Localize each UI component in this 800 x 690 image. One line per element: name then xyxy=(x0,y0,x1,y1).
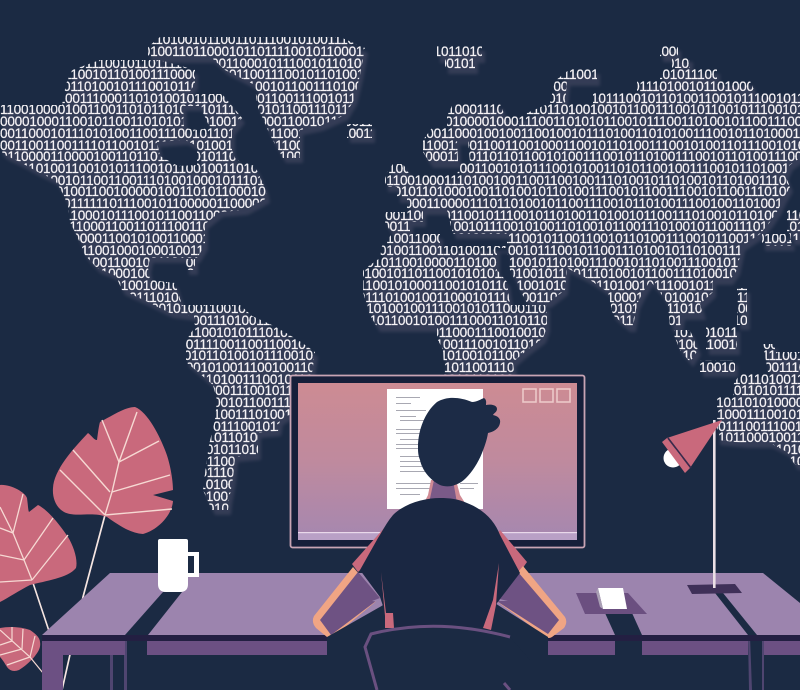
binary world map: 00110011101111110111001011000001100000110011101111101110000001100001110110100101100111001011010011100100110100101 xyxy=(0,196,797,211)
binary world map: 10010110100111000110101001011000111001100111001011010011100010110100111001011010001101110010110100110010111001011 xyxy=(0,91,800,106)
binary world map: 01001110010110000110001101011100101100111010010110100111000101101001110010110100111001100111001011011101101010000 xyxy=(0,395,800,410)
desk top xyxy=(42,573,800,635)
binary world map: 10011100101100111010010110100111001011001110010110100111010010110011100101101001110010110100111001011010011100101 xyxy=(0,465,800,480)
window buttons xyxy=(523,389,570,402)
desk front band xyxy=(42,641,800,690)
plant: large leaf xyxy=(53,407,173,690)
binary world map: 00110011001111011001011100110100111001011001001000110000100110011001100110010001100101101001110010100110111001010 xyxy=(0,138,800,153)
lamp bulb xyxy=(664,448,682,468)
desk thin back legs xyxy=(110,636,764,690)
binary world map: 11100110011100011001101110011001100011000110010011010100110010110010111001010011010010110011101001011001110100101 xyxy=(0,219,800,234)
binary world map: 00110001011101010011001110010110110101110010100110011100101100110001001001100100101110100110101001110010110100011 xyxy=(0,126,800,141)
desk lip xyxy=(42,635,800,641)
binary world map: 10110001101001011001110100100111001010011000011010011101001001100010111010011010010111000110101001011001110010110 xyxy=(0,290,800,305)
binary world map: 10100111001010110001011100001010011100100110110010101100110100101100111010010110100111001011001110100101101001110 xyxy=(0,360,800,375)
desk gap left xyxy=(125,592,182,635)
left forearm xyxy=(313,567,380,638)
binary world map: 00001000110010110011010101100100110100011001011100110101010011010000100011100110101011001011100110100101100111001 xyxy=(0,114,800,129)
chair xyxy=(365,626,530,690)
binary world map: 01100001100001001101101101001011000110010011011101111101100000011001101101100101001110010110100111001011010011100 xyxy=(0,149,800,164)
binary world map: 01001011010011100101100111010010110100111001011010011100101100111010010110011100101101001110010110100101100111010 xyxy=(0,501,800,516)
binary world map: 10010011100011010110010011011000101101111001011000110100111001011010011100101101001110100101100011101001011010011 xyxy=(0,44,800,59)
binary world map: 10010110100111001011001110100101101001110010110100111001011001110100101100111001011010011100101101001101100010011 xyxy=(0,430,800,445)
binary world map: 01000110010000110010100110001001100001100110011100111010011000110100101110010110011001011010011100101100110100111 xyxy=(0,231,800,246)
head xyxy=(418,398,500,486)
screen bottom bar xyxy=(298,532,577,540)
monitor screen xyxy=(298,383,577,540)
shirt slits xyxy=(381,563,499,630)
desk gap right xyxy=(715,593,757,635)
monitor xyxy=(290,376,584,548)
binary world map: 10110100111001011000101110010110011101001011001110010110100111001011010011100101101001100101100111001100011100101 xyxy=(0,407,800,422)
binary world map: 01100111000100110100100101001000110101001110001100110010100011001010110110010101100110100101110010110011101001011 xyxy=(0,278,800,293)
binary world map: 01011010011100101100111010010110011100101101001110010110100101100111010010110100111001011001110100101101001110010 xyxy=(0,454,800,469)
binary world map: 01010110010110011001110100100010111010101100110011010011001000111010010011001100100111010010110100101101001110010 xyxy=(0,173,800,188)
binary world map: 01100101001011001110111011010110100101110010100110011000110011101001011001101001011100101101001110010110100111001 xyxy=(0,348,800,363)
binary world map: 01101111110111001000100010011001010000100100001001011010011001101001101001011100101100111010010110100111001011010 xyxy=(0,243,800,258)
neck xyxy=(424,480,465,503)
binary world map: 01100111001011001100101101000111010011100100101100011011001010011100011010110100111001011001110100101101001110010 xyxy=(0,313,800,328)
binary world map: 11010011100010011001001101000110100111000101010010001011001000011010011100101101001110010110100111001011010011100 xyxy=(0,255,800,270)
binary world map: 11000100111001011010011100000010011001110010110100111000101101001110010110100011100101101001101011100010110100111 xyxy=(0,67,800,82)
binary world map: 11010001110010110000011000011110011001100101001100100110100101001110010110100110101001110010110100110010111001011 xyxy=(0,337,800,352)
desk xyxy=(42,573,800,690)
binary world map: 10110011101001011001110010110100111001011010011100101100111010010110100111001011001110010110100111010010110011100 xyxy=(0,489,800,504)
binary world map: 10011100101001100100000101001100101001110001011010110100100111001010110001101001011100101100111010010110011101001 xyxy=(0,301,800,316)
plant: small leaf xyxy=(0,627,43,673)
binary world map: 10011010011001010111001011001001101001100101011001010010001001110011001010111001010011010110010011100101101001110 xyxy=(0,161,800,176)
binary world map: 11001000010011001101011010011011101001011001110111011110010000010001110100110110100100101100111001011001011100101 xyxy=(0,102,800,117)
note on desk xyxy=(576,588,647,614)
lower body shadow xyxy=(327,600,548,690)
binary world map: 01100111010010110011100101101001110010110100101100111010010110100111001011010011100101100111010010110011100111001 xyxy=(0,419,800,434)
binary world map: 11011100010011001000001001101011000100110000110011001100101101000100110100101101001110010110011100101100111010010 xyxy=(0,184,800,199)
desk gap centre xyxy=(605,613,642,635)
binary world map: 11001011001110100101101001110010110100101100111010010110100111001011001110100101100111001011010011100101101001010 xyxy=(0,442,800,457)
binary world map: 00111010110011100101101111000100110001011100101101001100111010001011100101100110100111000110100101110010110100110 xyxy=(0,56,800,71)
lamp pole xyxy=(713,420,716,588)
right forearm xyxy=(495,566,566,638)
binary world map: 01100010111000101110010110011000110001011100010110001000110001011001011100101101001101001011001110100101101001110 xyxy=(0,208,800,223)
person xyxy=(313,398,566,690)
monitor frame xyxy=(290,376,584,548)
binary world map: 00110010100110000011000100110010101110101001011001110010100101100011100100101101001110010110011010010111001011001 xyxy=(0,325,800,340)
binary world map: 01101001011100101100111010010110011011100101001110100101100111010010111001011001101001011100101100111010010111001 xyxy=(0,32,800,47)
torso xyxy=(360,498,520,627)
right upper arm xyxy=(492,530,527,572)
lamp xyxy=(662,420,742,594)
binary world map xyxy=(0,32,800,516)
map ghost shadow xyxy=(2,42,800,516)
plant: middle leaf xyxy=(0,485,77,640)
lamp base xyxy=(687,584,742,594)
binary world map: 01101001110010110100101100111010010110100111001011001110100101100111001011010011100101101001011001110100101101001 xyxy=(0,477,800,492)
binary world map: 10010110011010100010011100010011011100001100111001010010110110010101011010010110011101001011001110100101101001101 xyxy=(0,266,800,281)
document on screen xyxy=(387,389,483,509)
desk seen under arms xyxy=(372,598,508,602)
binary world map: 11001011010011001001001101011000111001011010011100101100111010010110100111001011001110100101101001110010110101111 xyxy=(0,383,800,398)
binary world map: 00111001010010110011101100101101001110010110100110010110011101001011010011100101100111010010110100111001011010011 xyxy=(0,372,800,387)
binary world map: 01101110001101001011100101100110110100101100111010001110010110100111010010111000110010110011101001011010001110010 xyxy=(0,79,800,94)
mug xyxy=(158,539,199,592)
lamp shade xyxy=(667,420,722,468)
left upper arm xyxy=(352,527,392,572)
